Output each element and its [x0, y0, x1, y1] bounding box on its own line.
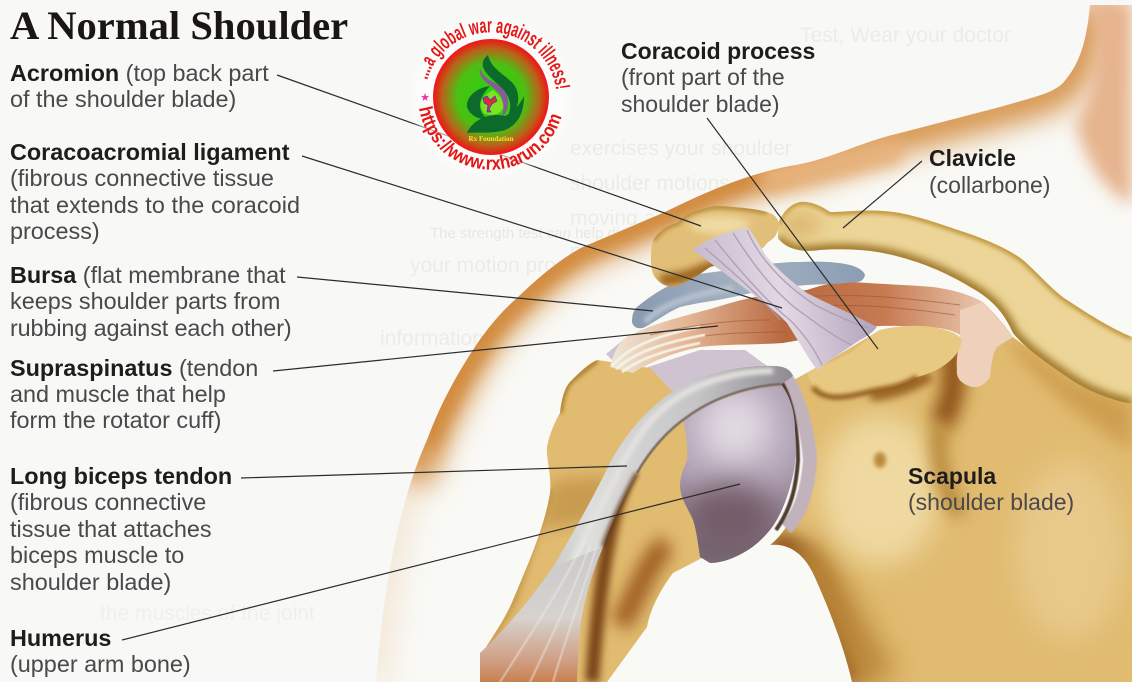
label: long biceps tendon: Long biceps tendon — [10, 463, 232, 489]
faded print-through background text: Test, Wear your doctor — [800, 24, 1011, 47]
label: scapula: (shoulder blade) — [908, 489, 1074, 515]
label: coracoacromial ligament: process) — [10, 218, 100, 244]
faded print-through background text: pack or reach — [570, 240, 697, 263]
supraspinatus leader — [273, 326, 718, 371]
label: coracoacromial ligament: that extends to the coracoid — [10, 192, 300, 218]
label: long biceps tendon: shoulder blade) — [10, 569, 171, 595]
coracoacromial ligament leader — [302, 156, 782, 308]
long biceps tendon leader — [241, 466, 627, 478]
label: coracoid process: Coracoid process — [621, 38, 815, 64]
humerus leader — [122, 484, 740, 640]
label: supraspinatus: and muscle that help — [10, 381, 226, 407]
logo arc text: slogan: ....a global war against illness! — [424, 21, 570, 89]
title: A Normal Shoulder — [10, 3, 348, 48]
acromion bone — [651, 206, 779, 287]
label: humerus: Humerus — [10, 625, 111, 651]
bursa — [632, 262, 865, 328]
faded print-through background text: How — [1010, 516, 1062, 546]
logo arc text: url: https://www.rxharun.com — [419, 106, 562, 170]
faded print-through background text: information about your — [380, 327, 589, 350]
label: bursa: rubbing against each other) — [10, 315, 292, 341]
clavicle leader — [843, 161, 922, 228]
label: supraspinatus: Supraspinatus — [10, 355, 172, 381]
label: clavicle: Clavicle — [929, 145, 1016, 171]
faded print-through background text: shoulder motions — [570, 172, 730, 195]
icon: star: ★ — [420, 92, 430, 104]
label: coracoid process: (front part of the — [621, 64, 785, 90]
coracoid process leader — [707, 118, 878, 349]
label: bursa: (flat membrane that — [76, 262, 286, 288]
label: long biceps tendon: (fibrous connective — [10, 489, 206, 515]
label: coracoacromial ligament: Coracoacromial ligament — [10, 139, 290, 165]
long biceps tendon — [480, 366, 793, 682]
glenoid rim — [776, 378, 810, 530]
icon: caring hands — [467, 55, 524, 133]
faded print-through background text: The strength test can help diagnose — [430, 225, 668, 242]
leader lines — [122, 75, 922, 640]
label: humerus: (upper arm bone) — [10, 651, 191, 677]
logo caption: Rx Foundation — [469, 135, 514, 143]
label: acromion: of the shoulder blade) — [10, 86, 236, 112]
acromion leader — [277, 75, 701, 226]
faded print-through background text — [100, 24, 1062, 625]
coracoacromial ligament — [693, 227, 877, 370]
label: coracoacromial ligament: (fibrous connective tissue — [10, 165, 274, 191]
humeral head cartilage — [680, 383, 796, 563]
cartilage behind tendons — [606, 336, 770, 398]
label: bursa: Bursa — [10, 262, 77, 288]
label: scapula: Scapula — [908, 463, 996, 489]
label: acromion: Acromion — [10, 60, 119, 86]
bursa leader — [297, 277, 653, 311]
label: bursa: keeps shoulder parts from — [10, 288, 280, 314]
faded print-through background text: your motion progress — [410, 254, 607, 277]
label: supraspinatus: form the rotator cuff) — [10, 407, 221, 433]
label: coracoid process: shoulder blade) — [621, 91, 780, 117]
clavicle bone — [778, 202, 1132, 404]
logo: Rx Foundation badge — [412, 21, 570, 170]
label: acromion: (top back part — [119, 60, 269, 86]
label: long biceps tendon: biceps muscle to — [10, 542, 184, 568]
faded print-through background text: the muscles of the joint — [100, 602, 315, 625]
humerus bone — [480, 360, 720, 682]
supraspinatus muscle — [610, 282, 1013, 387]
label: supraspinatus: (tendon — [172, 355, 258, 381]
coracoid process bone — [807, 326, 962, 397]
label: clavicle: (collarbone) — [929, 172, 1050, 198]
faded print-through background text: moving against the — [570, 207, 746, 230]
scapula bone — [770, 327, 1132, 682]
faded print-through background text: exercises your shoulder — [570, 137, 792, 160]
body skin silhouette — [370, 0, 1132, 682]
label: long biceps tendon: tissue that attaches — [10, 516, 212, 542]
